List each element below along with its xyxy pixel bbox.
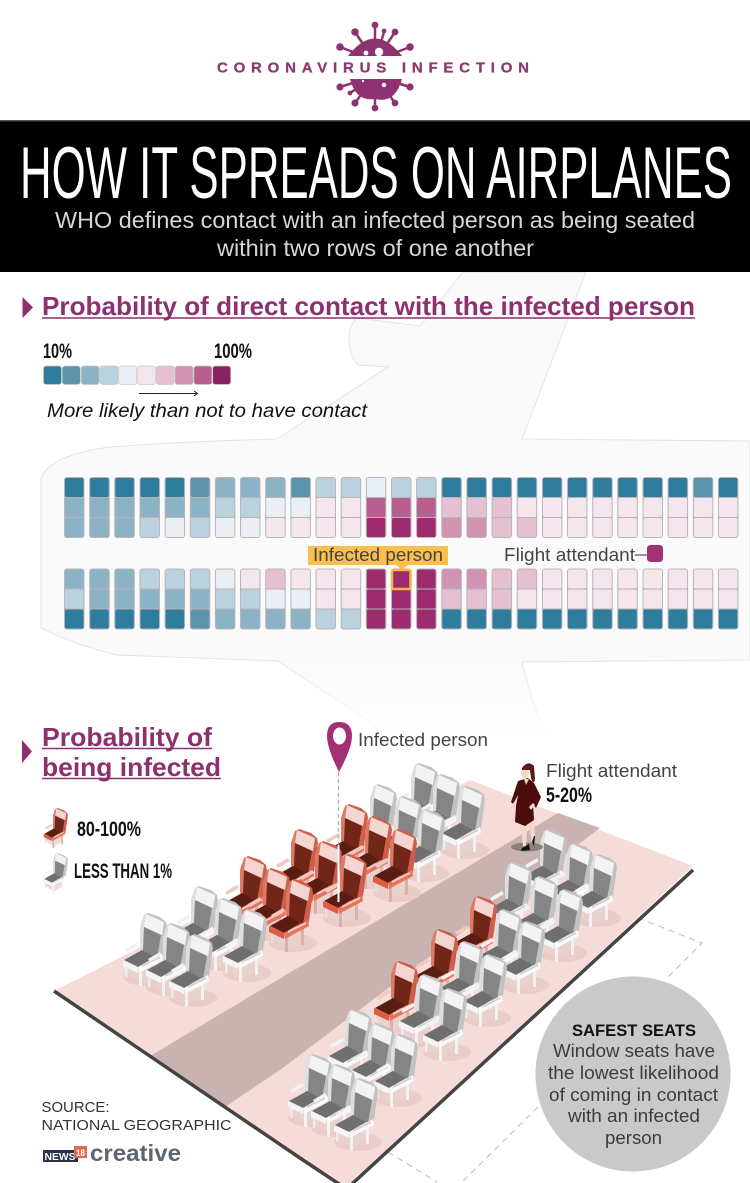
heading: probability of being infected — [22, 722, 221, 782]
logo: news18 creative: creative — [90, 1140, 181, 1166]
colour scale legend — [43, 340, 369, 422]
aisle — [150, 813, 600, 1107]
cabin floor — [54, 780, 702, 1183]
callout: safest seats: of coming in contact — [549, 1085, 718, 1105]
callout: safest seats — [536, 976, 730, 1172]
icon: virus bottom half — [336, 79, 414, 111]
label: flight attendant probability: Flight attendant — [546, 761, 677, 781]
callout: safest seats: person — [605, 1128, 662, 1148]
source credit — [42, 1100, 232, 1134]
airplane silhouette — [41, 272, 750, 750]
colour scale legend: 10% — [43, 340, 72, 363]
icon: virus top half — [336, 22, 414, 56]
callout: safest seats: with an infected — [567, 1106, 700, 1126]
source credit: NATIONAL GEOGRAPHIC — [42, 1118, 232, 1134]
header: coronavirus infection — [217, 22, 529, 111]
callout: infected person seat — [308, 545, 448, 589]
title banner — [0, 120, 750, 272]
logo: news18 creative — [43, 1140, 181, 1166]
illustration: flight attendant — [511, 763, 543, 852]
logo: news18 creative: 18 — [76, 1148, 85, 1159]
legend: seat risk: 80-100% — [77, 818, 141, 841]
scale caption: More likely than not to have contact — [47, 400, 369, 422]
header label: CORONAVIRUS INFECTION — [217, 60, 529, 76]
heading: probability of being infected: being infected — [42, 752, 221, 782]
callout: safest seats: the lowest likelihood — [548, 1063, 719, 1083]
right seat bank — [288, 829, 621, 1151]
source credit: SOURCE: — [42, 1100, 110, 1116]
callout: flight attendant seat: Flight attendant — [504, 545, 635, 565]
subtitle: WHO defines contact with an infected person as being seated — [55, 207, 695, 233]
heading: probability of direct contact: Probability of direct contact with the infected person — [42, 291, 695, 321]
legend: seat risk — [44, 808, 172, 893]
icon: infected person pin: Infected person — [358, 730, 488, 750]
heading: probability of being infected: Probability of — [42, 722, 212, 752]
left seat bank — [123, 763, 489, 1007]
legend: seat risk: LESS THAN 1% — [74, 860, 172, 883]
colour scale legend: 100% — [214, 340, 252, 363]
subtitle: within two rows of one another — [216, 235, 534, 261]
subtitle — [55, 207, 695, 261]
cabin wall — [54, 870, 693, 1183]
label: flight attendant probability — [546, 761, 677, 807]
logo: news18 creative: NEWS — [44, 1152, 76, 1163]
callout: safest seats: SAFEST SEATS — [572, 1021, 696, 1040]
callout: infected person seat: Infected person — [313, 545, 443, 565]
callout: safest seats: Window seats have — [553, 1041, 715, 1061]
seat map: second row — [64, 568, 738, 630]
label: flight attendant probability: 5-20% — [546, 784, 592, 807]
seat map: window-side row — [64, 477, 738, 538]
icon: infected person pin — [327, 722, 488, 902]
window dashes — [388, 918, 702, 1182]
arrow — [139, 391, 198, 396]
